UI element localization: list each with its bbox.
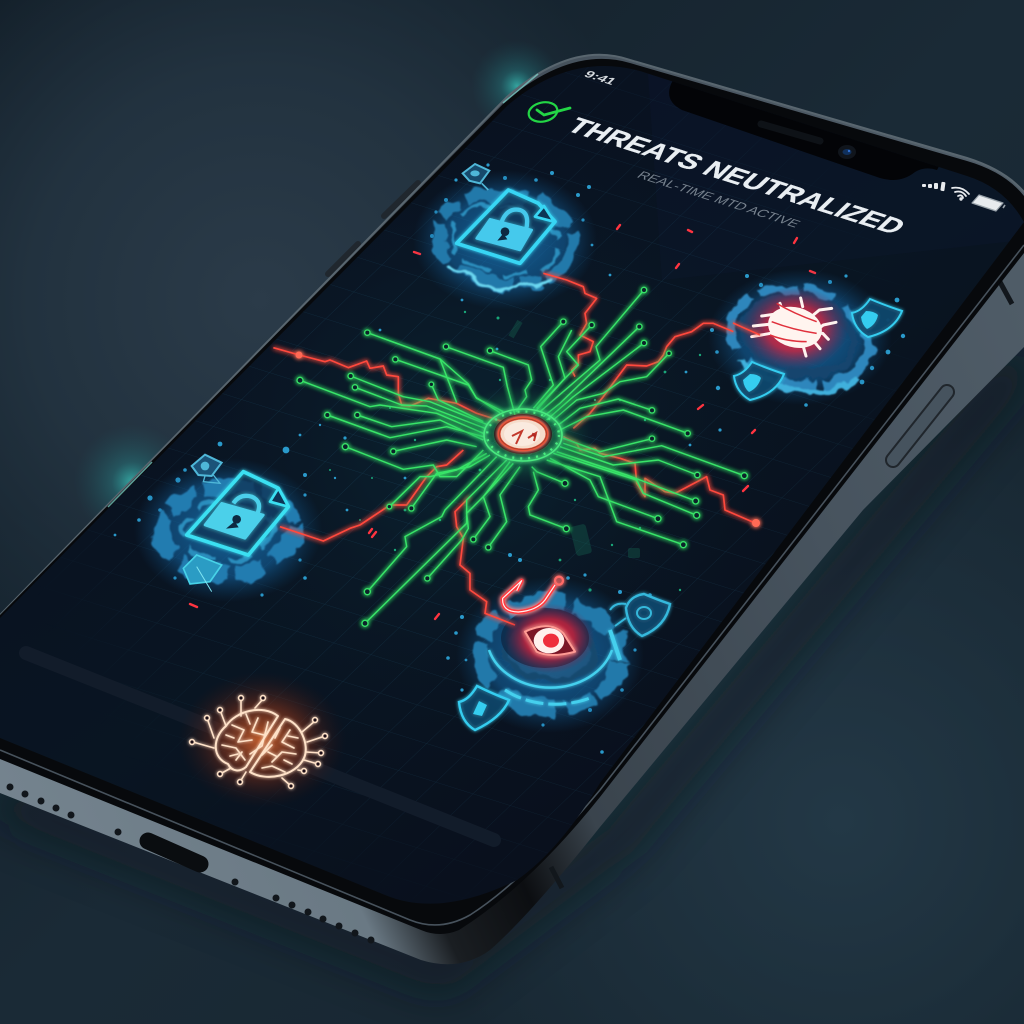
- central core: [460, 390, 585, 480]
- faint green smudges: [508, 320, 640, 558]
- title: THREATS NEUTRALIZED: [561, 113, 912, 239]
- green circuit traces: [297, 287, 747, 626]
- bottom bar: [26, 653, 494, 840]
- speaker and port: [6, 784, 374, 944]
- icon: shield below bug: [734, 362, 784, 400]
- threat link into bug: [733, 323, 760, 335]
- grid: [82, 67, 894, 868]
- glow: left edge: [74, 424, 190, 540]
- status: battery: [972, 195, 1005, 211]
- status: wifi: [952, 188, 969, 200]
- disc: left lock: [139, 462, 317, 598]
- icon: small shield on left lock: [192, 455, 222, 483]
- icon: shield below eye: [459, 686, 509, 730]
- threat nodes: [296, 352, 760, 527]
- speaker grille: [761, 124, 820, 141]
- circuit end nodes: [297, 287, 747, 626]
- subtitle: REAL-TIME MTD ACTIVE: [634, 169, 804, 230]
- icon: shield right of bug: [852, 299, 902, 337]
- icon: eye: [504, 603, 594, 673]
- icon: phishing hook: [503, 577, 563, 612]
- icon: gem fragment on left lock: [183, 555, 222, 592]
- green particles: [329, 311, 701, 592]
- heading icon: green check: [527, 100, 570, 124]
- icon: shield right of eye: [610, 594, 670, 636]
- side buttons upper edge: [328, 183, 418, 274]
- status: time: 9:41: [581, 68, 620, 87]
- icon: file lock left: [187, 472, 288, 555]
- camera: [838, 145, 856, 159]
- red threat traces: [273, 273, 760, 625]
- icon: file lock top: [457, 190, 555, 263]
- status: signal bars: [922, 182, 946, 191]
- blue particles: [114, 163, 905, 754]
- disc: eye: [461, 581, 639, 729]
- icon: bug: [742, 287, 848, 370]
- icon: ai brain: [186, 680, 336, 800]
- red fragments: [190, 225, 815, 619]
- disc: bug: [708, 269, 892, 405]
- glow: top corner: [471, 40, 563, 132]
- disc: top lock: [413, 170, 597, 310]
- icon: small shield on top lock: [463, 164, 489, 190]
- notch: [669, 82, 938, 180]
- side button right: [893, 392, 947, 460]
